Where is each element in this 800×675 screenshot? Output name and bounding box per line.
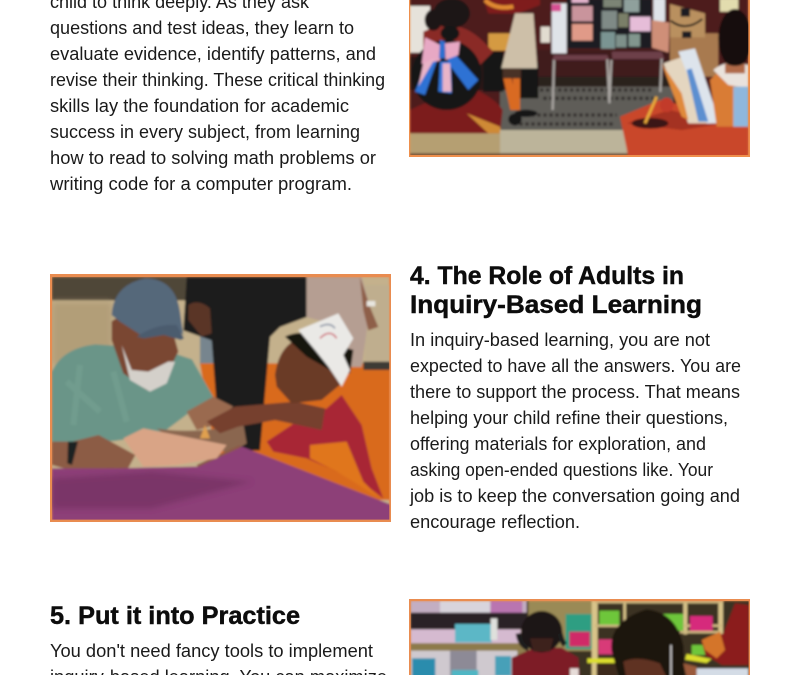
display board xyxy=(567,0,652,48)
section 4 body text: there to support the process. That means xyxy=(410,382,740,402)
section 4 body text: In inquiry-based learning, you are not xyxy=(410,330,710,350)
bin and books xyxy=(620,100,748,157)
section 5 body text: You don't need fancy tools to implement xyxy=(50,641,373,661)
standing child xyxy=(483,0,540,13)
table edge xyxy=(410,133,630,155)
section 3 body text: how to read to solving math problems or xyxy=(50,148,376,168)
section 4 body text: encourage reflection. xyxy=(410,512,580,532)
right child xyxy=(708,73,737,128)
section 4 body text: asking open-ended questions like. Your xyxy=(410,460,713,480)
man head xyxy=(110,318,180,378)
section 4 body text: offering materials for exploration, and xyxy=(410,434,706,454)
section 3 body text: writing code for a computer program. xyxy=(49,174,352,194)
section 4 body text: job is to keep the conversation going and xyxy=(409,486,740,506)
shelves xyxy=(527,601,750,675)
girl in front xyxy=(611,609,685,675)
adult at right xyxy=(702,603,749,665)
man torso xyxy=(52,344,214,443)
section 5 heading: 5. Put it into Practice xyxy=(50,602,300,630)
photo: children at classroom shelves xyxy=(409,599,750,675)
child arm and head xyxy=(207,402,325,433)
section 3 body text: questions and test ideas, they learn to xyxy=(50,18,354,38)
section 4 heading xyxy=(410,262,702,319)
section 5 body text xyxy=(50,641,387,675)
section 3 body text: evaluate evidence, identify patterns, and xyxy=(50,44,376,64)
child body xyxy=(267,395,383,498)
section 3 body text: revise their thinking. These critical thinking xyxy=(50,70,385,90)
section 3 body text: success in every subject, from learning xyxy=(50,122,360,142)
section 4 body text: helping your child refine their questions, xyxy=(410,408,728,428)
photo: adult and child reading xyxy=(50,274,392,522)
yellow papers xyxy=(587,658,617,663)
section 3 body text xyxy=(49,0,385,194)
seated child left xyxy=(410,90,503,134)
chairs xyxy=(552,52,664,60)
table xyxy=(52,447,392,522)
paper xyxy=(123,428,227,467)
section 4 heading: Inquiry-Based Learning xyxy=(410,291,702,319)
section 4 heading: 4. The Role of Adults in xyxy=(410,262,684,290)
photo: science fair classroom xyxy=(409,0,752,157)
cardboard boxes xyxy=(670,33,718,77)
section 4 body text: expected to have all the answers. You are xyxy=(410,356,741,376)
section 3 body text: skills lay the foundation for academic xyxy=(50,96,349,116)
girl in red xyxy=(512,648,580,675)
section 4 body text xyxy=(409,330,741,532)
standing adults background xyxy=(183,277,307,450)
